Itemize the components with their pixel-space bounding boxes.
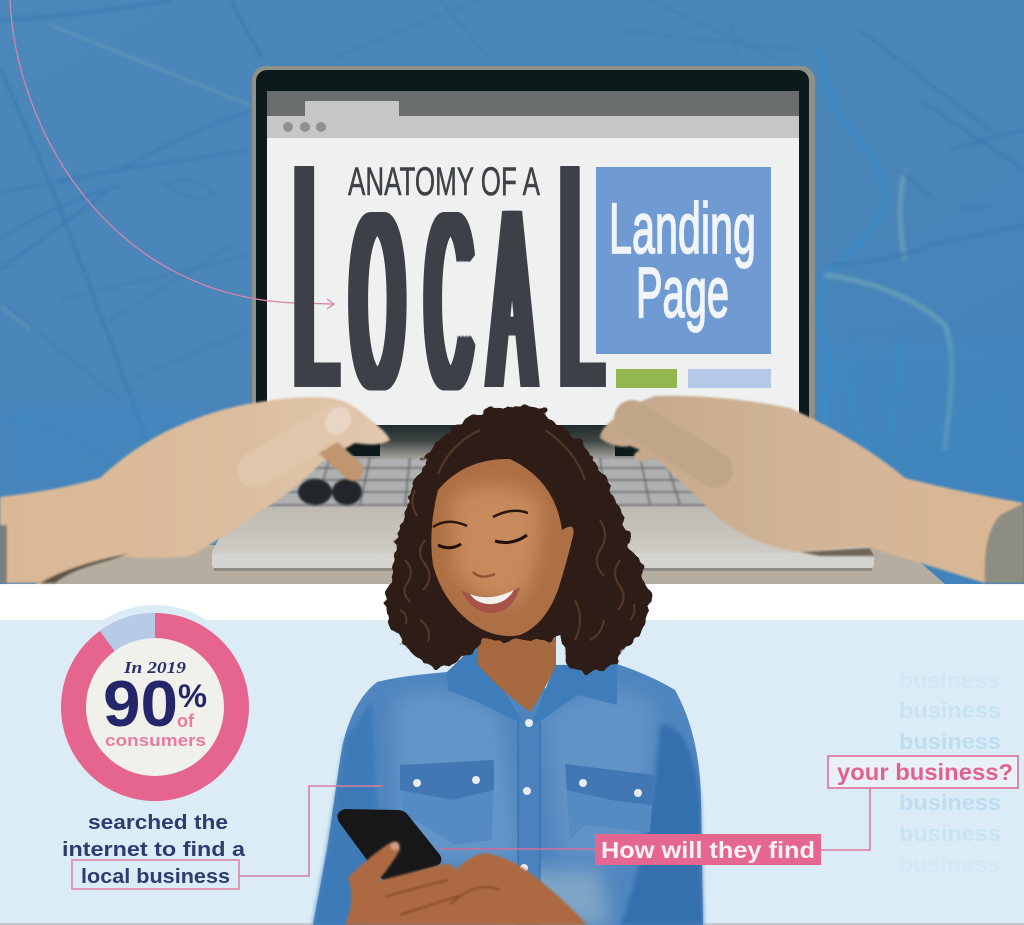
eyes: [438, 535, 527, 548]
buttons: [413, 719, 642, 872]
heading: local: L: [288, 97, 331, 456]
placket: [518, 722, 540, 925]
shirt: [313, 640, 703, 925]
donut label: [103, 658, 207, 750]
callout: your business: your business?: [837, 759, 1013, 785]
connector: question to your business: [820, 788, 870, 850]
heading: local: A: [484, 156, 527, 442]
decorative pink arrow: [10, 0, 334, 309]
laptop base and keyboard: [212, 440, 875, 571]
light blue bar: [688, 369, 771, 388]
heading: local: C: [420, 161, 465, 442]
donut chart: [59, 605, 251, 801]
woman with phone: [313, 407, 703, 925]
neck: [478, 610, 556, 712]
brows: [433, 511, 528, 527]
repeated business words: business: [899, 668, 1000, 693]
hands holding phone: [345, 842, 587, 925]
left hand on keyboard: [0, 397, 390, 583]
blue map background: [0, 0, 1024, 584]
repeated business words: [899, 668, 1001, 877]
donut label: consumers: [105, 731, 206, 750]
hair: [386, 407, 650, 675]
donut label: In 2019: [123, 658, 187, 677]
statistic caption: internet to find a: [62, 839, 246, 861]
face: [431, 459, 574, 636]
desk: [35, 545, 945, 584]
heading: local: O: [345, 161, 396, 442]
panel: landing page: Landing: [609, 190, 756, 269]
heading: local: L: [554, 97, 596, 456]
phone: [337, 809, 441, 880]
statistic caption: local business: [81, 866, 230, 888]
callout: how will they find: How will they find: [601, 837, 815, 863]
panel: landing page: [596, 167, 771, 354]
connector: phone to question: [440, 848, 596, 850]
green bar: [616, 369, 677, 388]
repeated business words: business: [899, 821, 1001, 846]
donut label: %: [178, 678, 207, 714]
light blue lower panel: [0, 620, 1024, 925]
connector: local business to phone: [239, 786, 383, 876]
repeated business words: business: [899, 790, 1001, 815]
heading: local: [288, 97, 606, 456]
right hand on keyboard: [600, 396, 1024, 583]
nose: [473, 572, 495, 577]
laptop screen frame: [252, 66, 815, 458]
donut label: 90: [103, 667, 178, 740]
statistic caption: [62, 812, 246, 888]
donut label: of: [177, 711, 195, 731]
collar: [447, 640, 525, 725]
repeated business words: business: [899, 729, 1001, 754]
panel: landing page: Page: [636, 254, 729, 333]
pockets: [400, 760, 494, 845]
statistic caption: searched the: [88, 812, 228, 834]
heading: anatomy of a: ANATOMY OF A: [348, 160, 540, 204]
repeated business words: business: [899, 852, 1000, 877]
smile: [461, 587, 520, 613]
browser window: [267, 91, 799, 425]
repeated business words: business: [899, 698, 1001, 723]
local business outline box: [72, 860, 239, 889]
